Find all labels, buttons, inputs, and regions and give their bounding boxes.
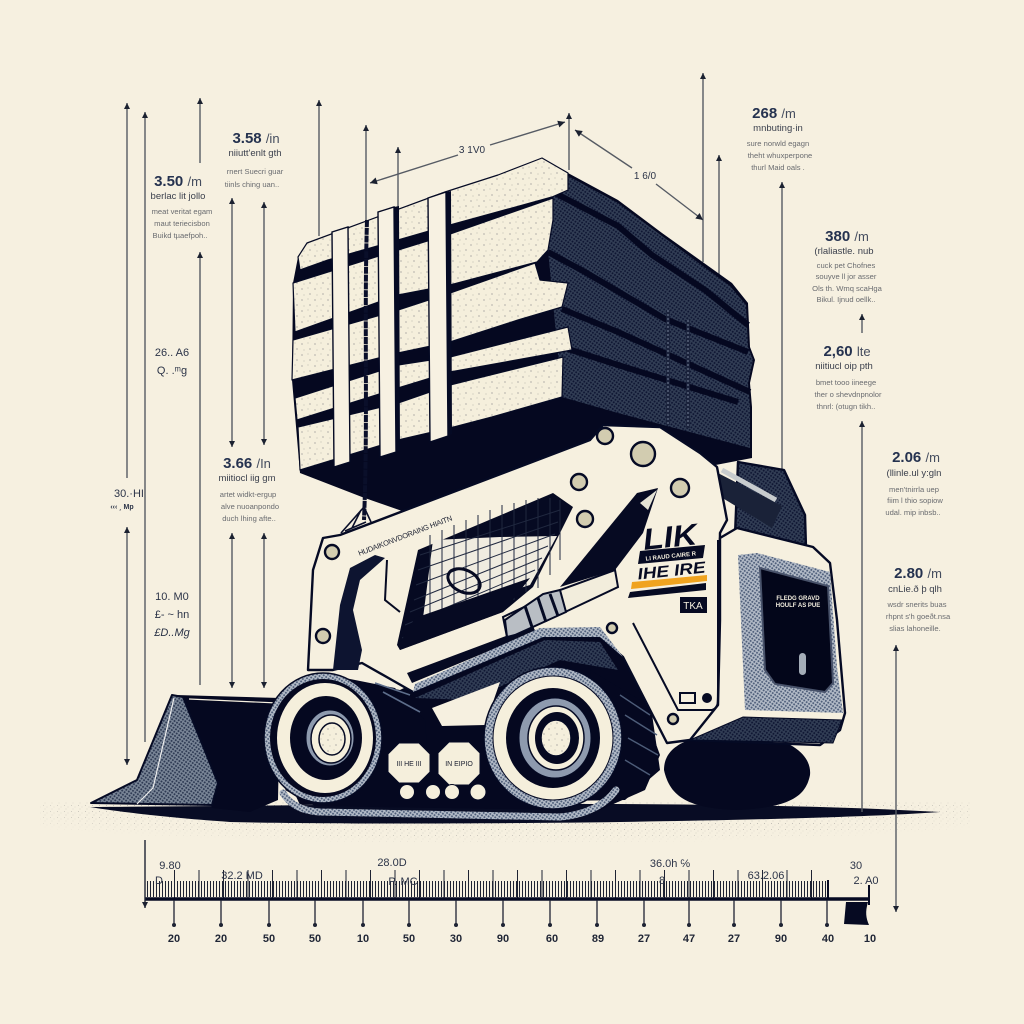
rear straps xyxy=(668,310,688,428)
callout: 10.M0: £- ~ hn xyxy=(155,609,189,621)
rear track wheel xyxy=(484,667,622,809)
callout: 3.58: tiinls ching uan.. xyxy=(225,180,279,189)
callout: 3.50: 3.50 /m xyxy=(154,173,202,190)
side seams xyxy=(548,193,750,402)
callout: 2.60: bmet tooo iineege xyxy=(816,378,876,387)
ruler values: 50 xyxy=(403,933,415,945)
callout: 3.50: Buikd tµaefpoh.. xyxy=(152,231,208,240)
undercarriage dark xyxy=(270,630,660,805)
ruler upper labels: 30 xyxy=(850,860,862,872)
callout: 380: Bikul. Ijnud oellk.. xyxy=(816,295,876,304)
vertical dimension arrows xyxy=(127,73,896,912)
callout: 2.60: ther o shevdnpnolor xyxy=(814,390,882,399)
brand decal: IHE IRE xyxy=(637,559,708,584)
ruler values: 90 xyxy=(497,933,509,945)
bucket side plate xyxy=(91,695,218,805)
light gap between wheels xyxy=(432,682,500,726)
horizontal width dimension arrows: 3 1V0 xyxy=(459,145,486,156)
bolts xyxy=(316,428,689,724)
ruler values: 89 xyxy=(592,933,604,945)
callout: 380: souyve ll jor asser xyxy=(816,272,877,281)
track rollers with tags: IN EIPIO xyxy=(445,761,473,768)
callout: 3.66 xyxy=(218,455,279,523)
ruler values: 10 xyxy=(357,933,369,945)
ruler values: 47 xyxy=(683,933,695,945)
callout: 268: mnbuting·in xyxy=(753,123,803,134)
callout: 2.80 xyxy=(886,565,951,633)
callout: 2.60 xyxy=(814,343,882,411)
fine ticks xyxy=(147,881,828,897)
chassis edge halftone xyxy=(413,627,623,692)
callout: 2.06: fiim l thio sopiow xyxy=(887,496,943,505)
callout: 30.HI: 30.·HI xyxy=(114,488,144,500)
rope net xyxy=(341,507,371,533)
body shell xyxy=(308,425,747,743)
brand decal xyxy=(628,518,708,613)
callout: 2.80: 2.80 /m xyxy=(894,565,942,582)
hydraulic cylinder xyxy=(503,570,618,637)
cabin cage xyxy=(397,493,573,650)
ruler values: 40 xyxy=(822,933,834,945)
slab front faces xyxy=(292,158,572,470)
callout: 268: 268 /m xyxy=(752,105,796,122)
callout: 30.HI: ‹‹‹ ¸ Mp xyxy=(110,504,134,511)
callout: 2.06: men'tnirrla uep xyxy=(889,485,939,494)
undercarriage halftone xyxy=(415,640,618,700)
callout: 3.58 xyxy=(225,130,284,189)
callout: 3.58: 3.58 /in xyxy=(232,130,280,147)
callout: 2.06 xyxy=(885,449,943,517)
small port icons xyxy=(680,693,712,703)
rear wheel xyxy=(664,732,810,810)
callout: 2.06: udal. mip inbsb.. xyxy=(885,508,941,517)
horizontal width dimension arrows xyxy=(370,122,703,220)
callout: 3.50: maut teriecisbon xyxy=(154,219,210,228)
track rollers with tags xyxy=(388,742,486,800)
brand decal: TKA xyxy=(683,601,703,612)
callout: 380: cuck pet Chofnes xyxy=(817,261,876,270)
ruler values: 20 xyxy=(215,933,227,945)
ruler values: 10 xyxy=(864,933,876,945)
callout: 3.66: duch lhing afte.. xyxy=(222,514,276,523)
ruler values: 50 xyxy=(309,933,321,945)
ruler upper labels: D xyxy=(155,875,163,887)
ruler upper labels: 8 xyxy=(659,875,665,887)
inner body line xyxy=(633,540,718,710)
front wheel xyxy=(264,673,382,803)
ruler values: 20 xyxy=(168,933,180,945)
ruler values: 60 xyxy=(546,933,558,945)
bottom ruler xyxy=(145,840,879,945)
bucket interior xyxy=(176,695,280,812)
ruler values: 90 xyxy=(775,933,787,945)
ruler upper labels xyxy=(155,857,879,888)
down ticks xyxy=(174,900,827,924)
callout: 2.80: rhpnt s'h goeðt.nsa xyxy=(886,612,951,621)
crawler track xyxy=(283,670,660,817)
callout: 10.M0: 10. M0 xyxy=(155,591,189,603)
ruler upper labels: 28.0D xyxy=(377,857,407,869)
callout: 380 xyxy=(812,228,883,304)
cabin grid xyxy=(402,498,560,638)
screen slot xyxy=(799,653,806,675)
callout: 380: 380 /m xyxy=(825,228,869,245)
belt inner fill xyxy=(285,750,612,810)
ruler upper labels: P. MC xyxy=(388,876,418,888)
callout: 2.06: (llinle.ul y:gln xyxy=(887,468,941,479)
callout: 380: (rlaliastle. nub xyxy=(814,246,874,257)
callout: 3.50 xyxy=(151,173,212,240)
callout: 2.06: 2.06 /m xyxy=(892,449,940,466)
callout: 3.66: artet widkt-ergup xyxy=(220,490,276,499)
end block xyxy=(844,902,869,925)
screen text: FLEDG GRAVD xyxy=(776,596,820,602)
callout: 10.M0 xyxy=(153,591,191,639)
ruler values: 50 xyxy=(263,933,275,945)
callout: 2.80: wsdr snerits buas xyxy=(886,600,947,609)
slab halftone side xyxy=(548,176,753,448)
callout: 2.60: thnrl: (otugn tikh.. xyxy=(817,402,875,411)
callout: 26.A6: 26.. A6 xyxy=(155,347,189,359)
callout: 268: sure norwld egagn xyxy=(747,139,809,148)
ruler upper labels: 63.2.06 xyxy=(748,870,784,882)
arm label: HUDAIKONVDORAING HIAITN xyxy=(357,514,453,558)
stone slab load xyxy=(292,158,755,540)
callout: 3.50: meat veritat egam xyxy=(152,207,212,216)
front post hose xyxy=(333,555,385,670)
horizontal width dimension arrows: 1 6/0 xyxy=(634,171,657,182)
callout: 10.M0: £D..Mg xyxy=(153,627,191,639)
ruler baseline xyxy=(145,897,870,901)
ruler upper labels: 9.80 xyxy=(159,860,181,872)
track belt xyxy=(283,790,616,817)
ruler upper labels: 2. A0 xyxy=(853,875,879,887)
ruler values xyxy=(168,933,876,945)
rear engine panel: HOULF AS PUE xyxy=(776,603,820,609)
callout: 26.A6: Q. .ᵐg xyxy=(157,365,187,377)
callout: 3.50: berlac lit jollo xyxy=(151,191,205,202)
brand decal: LIK xyxy=(641,518,701,557)
callout: 3.58: niiutt'enlt gth xyxy=(228,148,282,159)
track rollers with tags: III HE III xyxy=(396,761,422,768)
callout: 3.66: alve nuoanpondo xyxy=(221,502,279,511)
black underside and silhouette xyxy=(292,158,755,540)
callout: 26.A6 xyxy=(155,347,189,377)
callout: 3.66: miitiocl iig gm xyxy=(218,473,276,484)
callout: 2.60: 2,60 lte xyxy=(823,343,871,360)
callout: 2.80: slias lahoneille. xyxy=(889,624,941,633)
tread hump xyxy=(300,677,430,790)
ruler upper labels: 32.2 MD xyxy=(221,870,263,882)
callout: 380: Ols th. Wmq scaHga xyxy=(812,284,883,293)
opening highlight xyxy=(640,490,657,510)
chassis slot xyxy=(407,627,537,683)
ruler values: 27 xyxy=(638,933,650,945)
callout: 268: thurl Maid oals . xyxy=(751,163,805,172)
callout: 30.HI xyxy=(110,488,144,511)
steering wheel xyxy=(444,564,484,598)
callout: 2.60: niitiucl oip pth xyxy=(815,361,873,372)
cabin bright interior xyxy=(423,536,557,618)
rear engine panel xyxy=(690,528,845,745)
display screen xyxy=(760,568,833,692)
loader bucket xyxy=(91,695,280,812)
long ticks xyxy=(174,870,828,898)
callout: 268: theht whuxperpone xyxy=(748,151,812,160)
strap bands xyxy=(332,191,452,467)
ground shadow xyxy=(40,802,970,842)
callout: 268 xyxy=(747,105,812,172)
ruler values: 27 xyxy=(728,933,740,945)
callout: 3.66: 3.66 /In xyxy=(223,455,271,472)
rear tread xyxy=(590,670,660,810)
ruler values: 30 xyxy=(450,933,462,945)
callout: 2.80: cnLie.ð þ qlh xyxy=(888,584,942,595)
brand decal: LI RAUD CAIRE R xyxy=(645,551,697,563)
hanging rope xyxy=(364,220,367,520)
engine housing xyxy=(706,462,806,548)
arm opening xyxy=(560,488,658,587)
cabin lower dark xyxy=(398,578,530,650)
skid steer body xyxy=(308,425,845,745)
ruler upper labels: 36.0h ℅ xyxy=(650,858,690,870)
callout: 3.58: rnert Suecri guar xyxy=(227,167,284,176)
